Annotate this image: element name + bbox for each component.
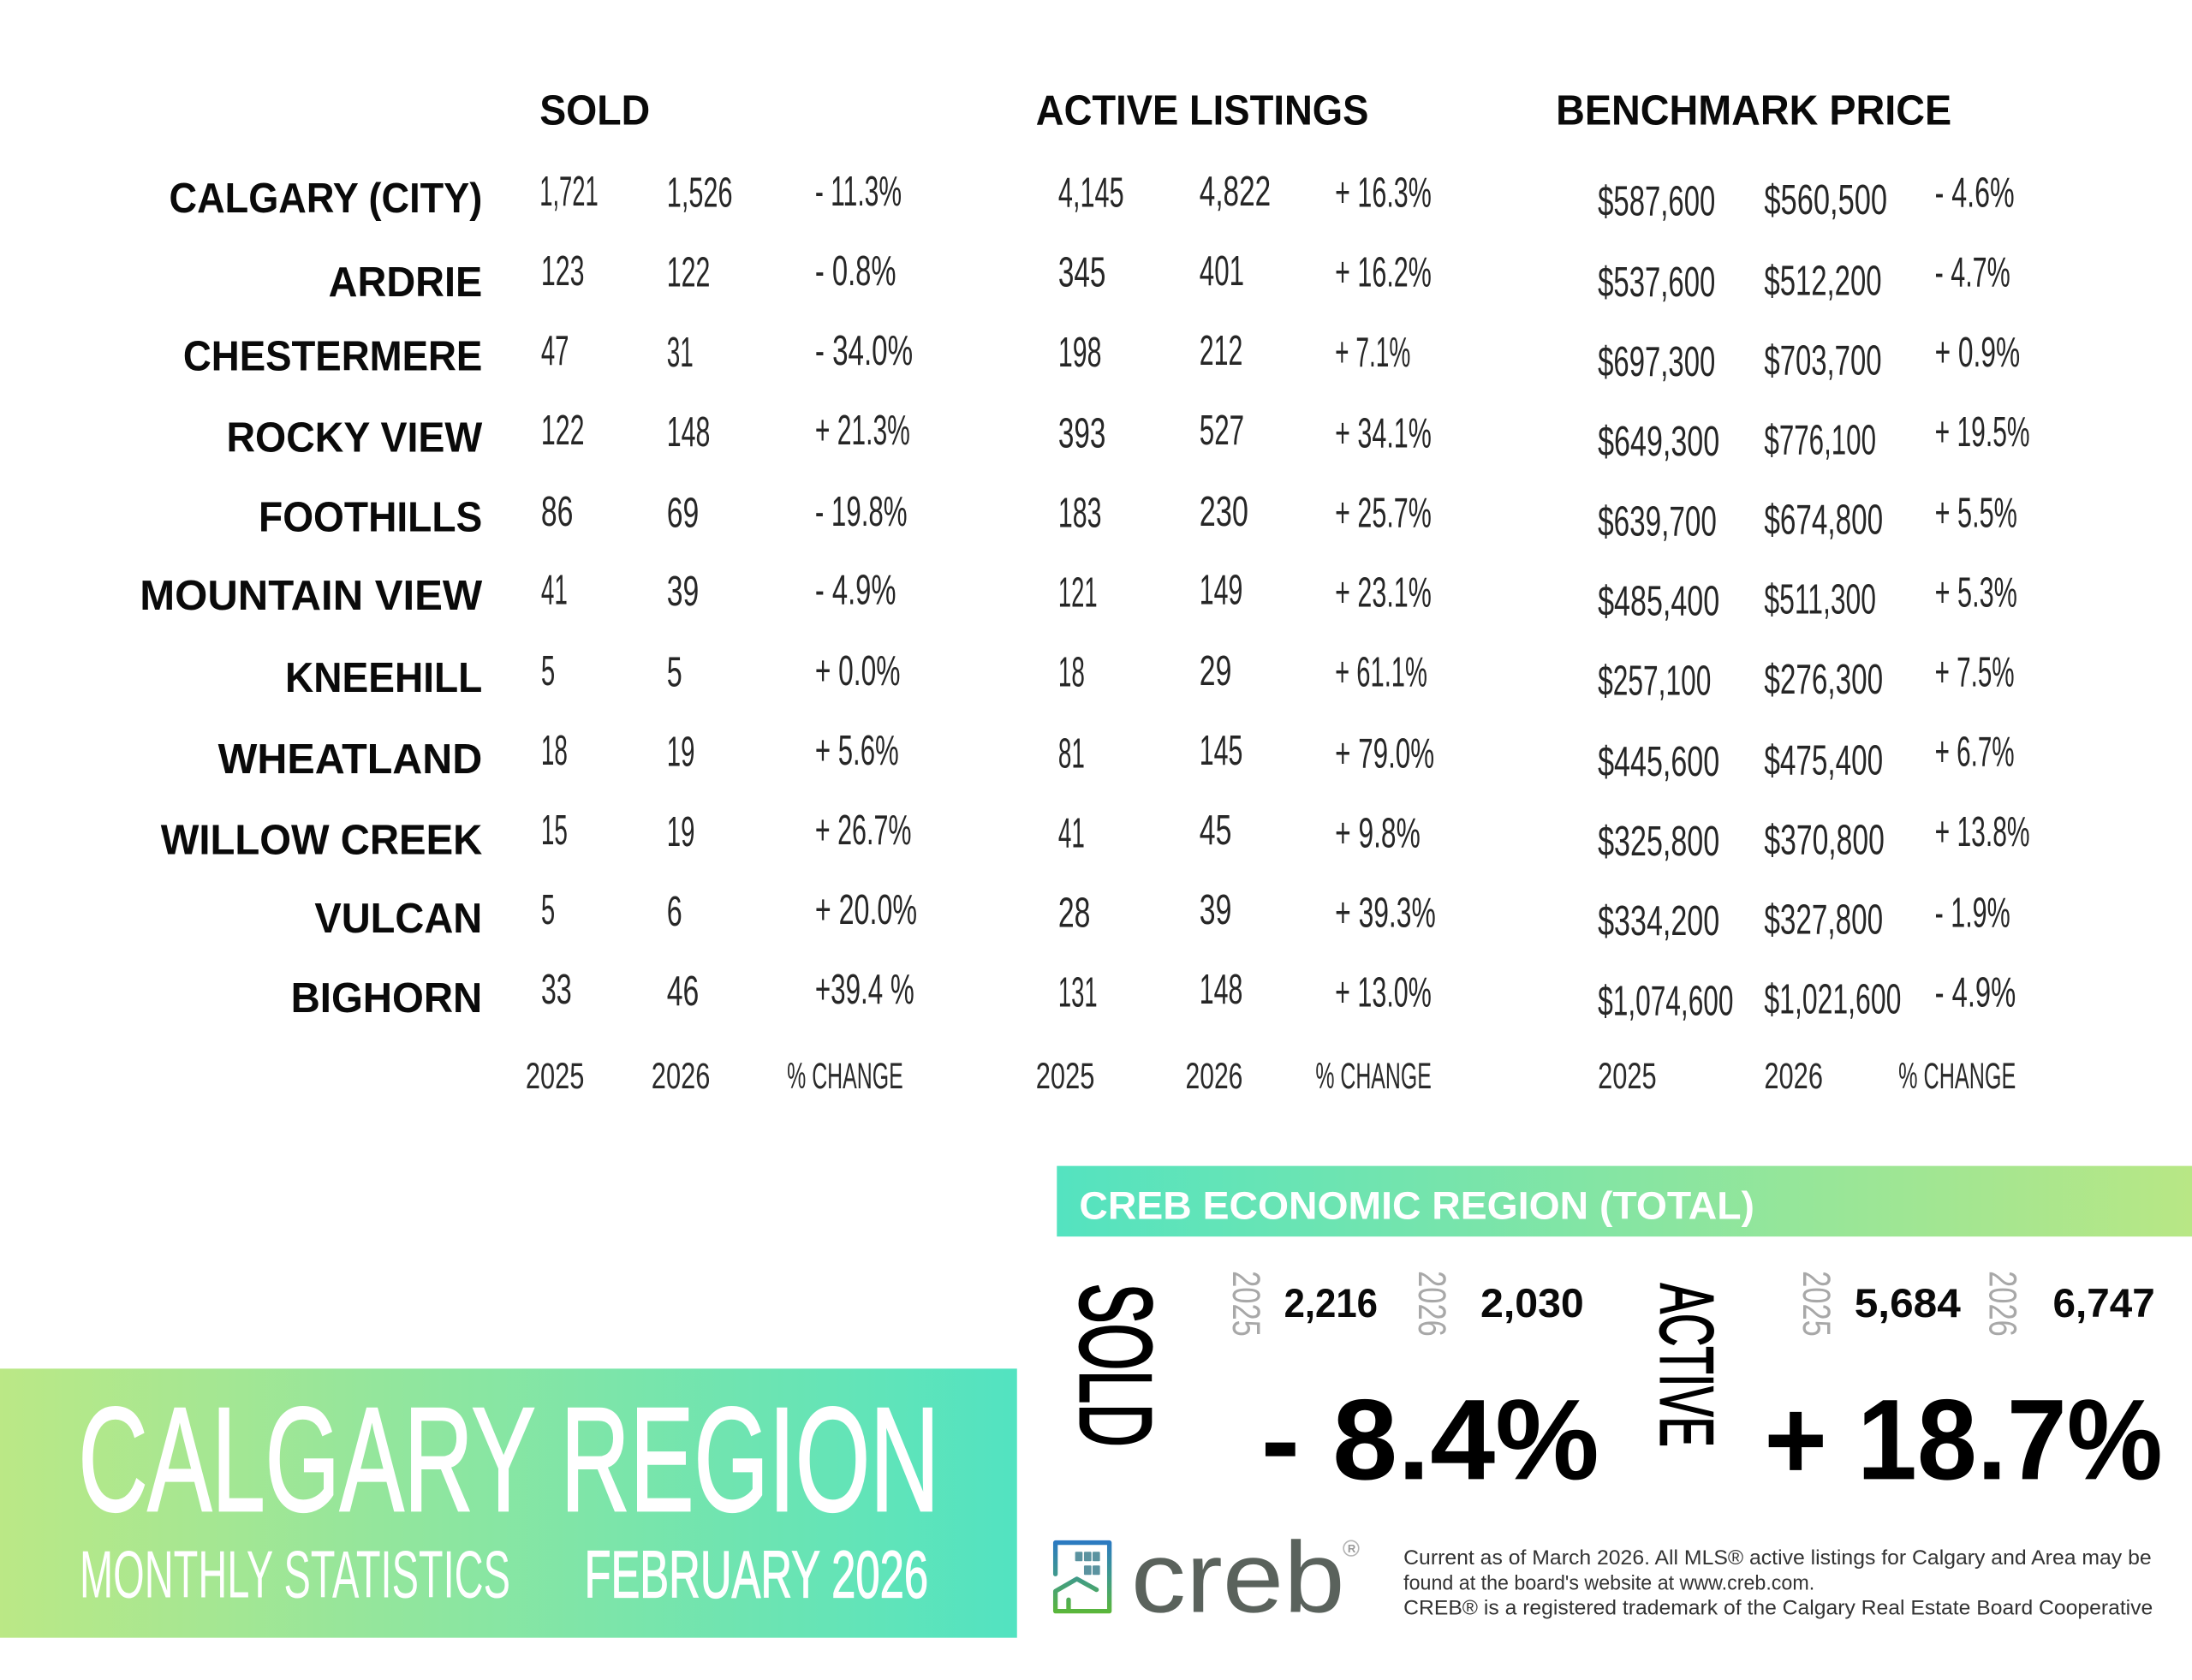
table: sold: 86: [541, 489, 573, 535]
table: benchmark price: $276,300: [1764, 657, 1883, 703]
table: sold: 46: [667, 968, 699, 1015]
table: active listings: 527: [1200, 408, 1244, 454]
year and percent change column footers: [526, 1056, 2016, 1096]
table: benchmark price: $334,200: [1598, 898, 1719, 944]
region name labels: ROCKY VIEW: [226, 414, 483, 461]
banner: CREB economic region total: CREB ECONOMIC REGION (TOTAL): [1079, 1184, 1754, 1228]
table: sold: - 19.8%: [815, 489, 908, 535]
table: benchmark price: $370,800: [1764, 818, 1885, 864]
table: sold: 19: [667, 730, 694, 776]
table: sold: 19: [667, 809, 694, 855]
table: benchmark price: $475,400: [1764, 737, 1883, 783]
table: sold: 5: [667, 650, 682, 696]
active year labels: [1795, 1271, 2024, 1337]
table: active listings: + 79.0%: [1335, 730, 1434, 777]
sold year labels: [1224, 1271, 1454, 1337]
table: active listings: + 39.3%: [1335, 890, 1436, 936]
table: sold: 5: [541, 648, 555, 694]
table: active listings: 45: [1200, 807, 1231, 854]
table: active listings: 18: [1058, 650, 1085, 696]
table: sold: - 4.9%: [815, 567, 896, 613]
wordmark: creb: [1131, 1521, 1345, 1633]
table: active listings: + 25.7%: [1335, 491, 1432, 537]
CREB logo: [1056, 1521, 1359, 1633]
table: benchmark price: $485,400: [1598, 578, 1719, 624]
region name labels: FOOTHILLS: [259, 494, 482, 540]
table: active listings: 149: [1200, 567, 1242, 613]
table: benchmark price: + 19.5%: [1935, 409, 2030, 456]
sold values: 2,216: [1284, 1281, 1378, 1326]
year and percent change column footers: 2026: [652, 1056, 710, 1096]
table: benchmark price: - 4.7%: [1935, 250, 2010, 296]
table: active listings: 29: [1200, 648, 1231, 694]
year and percent change column footers: % CHANGE: [787, 1056, 903, 1096]
table: benchmark price: + 5.3%: [1935, 570, 2017, 617]
table: benchmark price: $639,700: [1598, 498, 1717, 545]
year and percent change column footers: % CHANGE: [1898, 1056, 2016, 1096]
region name labels: KNEEHILL: [285, 655, 482, 701]
active year labels: 2025: [1795, 1271, 1838, 1337]
table: benchmark price: $445,600: [1598, 739, 1719, 785]
table: benchmark price: - 1.9%: [1935, 890, 2010, 936]
table: active listings: 39: [1200, 887, 1231, 933]
active values: 5,684: [1855, 1281, 1962, 1326]
column headings: SOLD: [539, 87, 650, 134]
column headings: ACTIVE LISTINGS: [1036, 87, 1368, 134]
column headings: [539, 87, 1951, 134]
date: FEBRUARY 2026: [584, 1536, 928, 1611]
table: active listings: [1058, 169, 1436, 1016]
table: benchmark price: + 13.8%: [1935, 809, 2030, 855]
table: active listings: 183: [1058, 491, 1102, 537]
sold values: [1284, 1281, 1584, 1326]
table: sold: + 26.7%: [815, 807, 911, 854]
disclaimer text: Current as of March 2026. All MLS® active listings for Calgary and Area may be: [1403, 1546, 2152, 1570]
sold total panel: [1058, 1271, 1599, 1504]
table: sold: 122: [541, 408, 584, 454]
disclaimer text: CREB® is a registered trademark of the Calgary Real Estate Board Cooperative: [1403, 1597, 2153, 1620]
table: sold: 148: [667, 409, 710, 456]
table: benchmark price: $537,600: [1598, 259, 1715, 306]
active total panel: [1645, 1271, 2163, 1504]
table: active listings: 4,145: [1058, 170, 1124, 217]
table: benchmark price: $325,800: [1598, 819, 1719, 865]
table: active listings: 131: [1058, 970, 1098, 1016]
table: active listings: + 9.8%: [1335, 810, 1421, 856]
table: sold: 31: [667, 330, 694, 376]
sold year labels: 2026: [1410, 1271, 1454, 1337]
table: sold: + 0.0%: [815, 648, 900, 694]
region name labels: CALGARY (CITY): [170, 176, 482, 222]
table: sold: 18: [541, 728, 568, 774]
table: sold: 122: [667, 250, 710, 296]
banner: CREB economic region total: [1057, 1166, 2192, 1236]
table: sold: 47: [541, 328, 569, 374]
table: benchmark price: $697,300: [1598, 339, 1715, 385]
sold percent change: - 8.4%: [1261, 1376, 1599, 1504]
disclaimer text: [1403, 1546, 2153, 1620]
disclaimer text: found at the board's website at www.creb.com.: [1403, 1571, 1814, 1594]
year and percent change column footers: 2025: [526, 1056, 584, 1096]
table: active listings: 393: [1058, 410, 1105, 456]
region name labels: BIGHORN: [291, 975, 482, 1022]
table: sold: 33: [541, 967, 572, 1013]
table: active listings: + 13.0%: [1335, 970, 1432, 1016]
table: benchmark price: + 0.9%: [1935, 330, 2020, 376]
active vertical label: ACTIVE: [1645, 1284, 1730, 1447]
subtitle: MONTHLY STATISTICS: [80, 1536, 510, 1611]
table: active listings: 121: [1058, 570, 1098, 617]
table: sold: 1,526: [667, 170, 733, 217]
active values: [1855, 1281, 2155, 1326]
table: benchmark price: + 7.5%: [1935, 650, 2015, 696]
table: active listings: 198: [1058, 330, 1102, 376]
active values: 6,747: [2053, 1281, 2155, 1326]
sold year labels: 2025: [1224, 1271, 1268, 1337]
table: benchmark price: $512,200: [1764, 258, 1882, 304]
table: active listings: + 16.2%: [1335, 250, 1432, 296]
region name labels: WHEATLAND: [218, 736, 482, 783]
table: active listings: + 61.1%: [1335, 650, 1427, 696]
year and percent change column footers: 2026: [1185, 1056, 1242, 1096]
table: active listings: 28: [1058, 890, 1090, 936]
table: benchmark price: $776,100: [1764, 418, 1876, 464]
table: sold: - 0.8%: [815, 248, 896, 295]
table: sold: [539, 169, 917, 1015]
registered mark: R: [1348, 1542, 1356, 1555]
table: active listings: + 23.1%: [1335, 570, 1432, 617]
table: active listings: 401: [1200, 248, 1244, 295]
table: sold: + 21.3%: [815, 408, 910, 454]
icon: building and house: [1056, 1543, 1110, 1611]
table: sold: 39: [667, 569, 699, 615]
year and percent change column footers: 2025: [1036, 1056, 1094, 1096]
region name labels: [140, 176, 483, 1022]
table: benchmark price: [1598, 170, 2030, 1024]
year and percent change column footers: % CHANGE: [1315, 1056, 1432, 1096]
table: benchmark price: $257,100: [1598, 658, 1711, 704]
table: benchmark price: $587,600: [1598, 178, 1715, 224]
table: sold: 5: [541, 887, 555, 933]
active year labels: 2026: [1981, 1271, 2024, 1337]
registered mark: [1343, 1540, 1359, 1556]
table: benchmark price: + 6.7%: [1935, 730, 2015, 776]
sold values: 2,030: [1480, 1281, 1584, 1326]
table: benchmark price: $511,300: [1764, 577, 1876, 623]
table: sold: 41: [541, 567, 568, 613]
region name labels: ARDRIE: [329, 259, 482, 306]
table: active listings: 41: [1058, 810, 1085, 856]
table: sold: - 34.0%: [815, 328, 913, 374]
table: active listings: 230: [1200, 489, 1248, 535]
table: sold: 6: [667, 889, 682, 935]
table: active listings: 148: [1200, 967, 1242, 1013]
table: sold: 1,721: [539, 169, 599, 215]
table: benchmark price: $327,800: [1764, 897, 1883, 944]
table: active listings: 145: [1200, 728, 1242, 774]
column headings: BENCHMARK PRICE: [1556, 87, 1951, 134]
table: active listings: 81: [1058, 730, 1085, 777]
table: benchmark price: + 5.5%: [1935, 491, 2017, 537]
title: CALGARY REGION: [78, 1376, 939, 1542]
table: sold: 15: [541, 807, 568, 854]
table: benchmark price: - 4.9%: [1935, 970, 2016, 1016]
table: sold: +39.4 %: [815, 967, 914, 1013]
table: benchmark price: $674,800: [1764, 497, 1883, 544]
table: sold: + 20.0%: [815, 887, 917, 933]
table: benchmark price: $703,700: [1764, 338, 1882, 384]
region name labels: WILLOW CREEK: [161, 818, 482, 864]
table: benchmark price: $1,021,600: [1764, 977, 1901, 1023]
table: benchmark price: $1,074,600: [1598, 978, 1733, 1024]
table: active listings: 4,822: [1200, 169, 1271, 215]
table: sold: + 5.6%: [815, 728, 899, 774]
year and percent change column footers: 2026: [1764, 1056, 1823, 1096]
title banner: Calgary Region: [0, 1368, 1017, 1638]
table: active listings: 212: [1200, 328, 1242, 374]
table: benchmark price: - 4.6%: [1935, 170, 2015, 217]
region name labels: CHESTERMERE: [183, 334, 482, 380]
table: sold: 69: [667, 491, 699, 537]
table: active listings: + 34.1%: [1335, 410, 1432, 456]
sold vertical label: SOLD: [1058, 1284, 1172, 1447]
table: benchmark price: $560,500: [1764, 177, 1887, 223]
table: active listings: 345: [1058, 250, 1105, 296]
table: sold: - 11.3%: [815, 169, 902, 215]
table: benchmark price: $649,300: [1598, 419, 1719, 465]
table: sold: 123: [541, 248, 584, 295]
active percent change: + 18.7%: [1764, 1376, 2163, 1504]
year and percent change column footers: 2025: [1598, 1056, 1657, 1096]
table: active listings: + 16.3%: [1335, 170, 1432, 217]
region name labels: MOUNTAIN VIEW: [140, 573, 483, 619]
region name labels: VULCAN: [314, 896, 482, 942]
table: active listings: + 7.1%: [1335, 330, 1410, 376]
